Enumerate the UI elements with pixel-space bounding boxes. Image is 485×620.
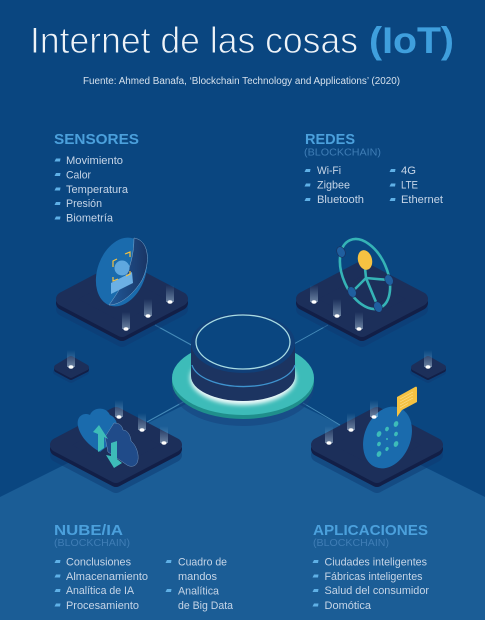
heading: redes: REDES — [305, 131, 355, 148]
list: redes: 4G — [401, 165, 416, 177]
small platform right — [413, 350, 443, 380]
icon: cloud with arrows — [78, 409, 138, 468]
list: redes: Zigbee — [317, 180, 350, 192]
network beacons — [310, 285, 363, 331]
list: nube: de Big Data — [178, 600, 234, 612]
heading: sensores: SENSORES — [54, 131, 139, 148]
connector lines — [147, 325, 340, 425]
list: redes: LTE — [401, 180, 418, 192]
icon: biometric lens — [87, 230, 156, 314]
list: nube: mandos — [178, 571, 217, 583]
title: (IoT) — [369, 20, 454, 61]
panel: network platform — [303, 231, 421, 340]
cloud beacons — [115, 400, 168, 445]
list: redes: Bluetooth — [317, 194, 364, 206]
subheading: nube blockchain: (BLOCKCHAIN) — [54, 537, 130, 549]
apps beacons — [325, 400, 378, 445]
list: nube: Cuadro de — [178, 556, 227, 568]
small platform left — [56, 350, 86, 380]
list: nube: Almacenamiento — [66, 571, 148, 583]
list: aplicaciones: Fábricas inteligentes — [324, 571, 423, 583]
list: redes: Ethernet — [401, 194, 444, 206]
central database cylinder — [172, 313, 314, 426]
list: nube: Analítica — [178, 586, 220, 598]
list: sensores: Calor — [66, 170, 91, 182]
list: nube: Analítica de IA — [66, 585, 135, 597]
icon: network ring — [330, 231, 400, 317]
list: nube: Conclusiones — [66, 556, 131, 568]
list: sensores: Movimiento — [66, 155, 123, 167]
heading: aplicaciones: APLICACIONES — [313, 522, 428, 539]
title: Internet de las cosas — [30, 20, 358, 61]
panel: nube text — [54, 522, 234, 612]
list: nube — [54, 556, 234, 612]
panel: aplicaciones text — [312, 522, 429, 612]
list: aplicaciones — [312, 556, 429, 612]
heading: nube: NUBE/IA — [54, 522, 123, 539]
panel: apps platform — [318, 387, 436, 486]
list: aplicaciones: Domótica — [324, 600, 372, 612]
panel: cloud platform — [57, 400, 175, 486]
list: aplicaciones: Ciudades inteligentes — [324, 556, 427, 568]
subheading: aplicaciones blockchain: (BLOCKCHAIN) — [313, 537, 389, 549]
list: redes — [304, 165, 444, 206]
sensor beacons — [122, 285, 174, 331]
list: redes: Wi-Fi — [317, 165, 341, 177]
source line: Fuente: Ahmed Banafa, ‘Blockchain Technology and Applications’ (2020) — [83, 76, 400, 87]
lower lighter floor — [0, 376, 485, 620]
list: nube: Procesamiento — [66, 600, 139, 612]
list: sensores — [54, 155, 129, 224]
subheading: redes blockchain: (BLOCKCHAIN) — [304, 146, 381, 158]
list: sensores: Temperatura — [66, 184, 129, 196]
list: sensores: Presión — [66, 198, 102, 210]
panel: sensor platform — [63, 230, 181, 340]
list: sensores: Biometría — [66, 212, 114, 224]
list: aplicaciones: Salud del consumidor — [324, 585, 429, 597]
panel: redes text — [304, 131, 444, 206]
panel: sensores text — [54, 131, 139, 224]
icon: keypad lens with speech bubble — [354, 387, 421, 476]
